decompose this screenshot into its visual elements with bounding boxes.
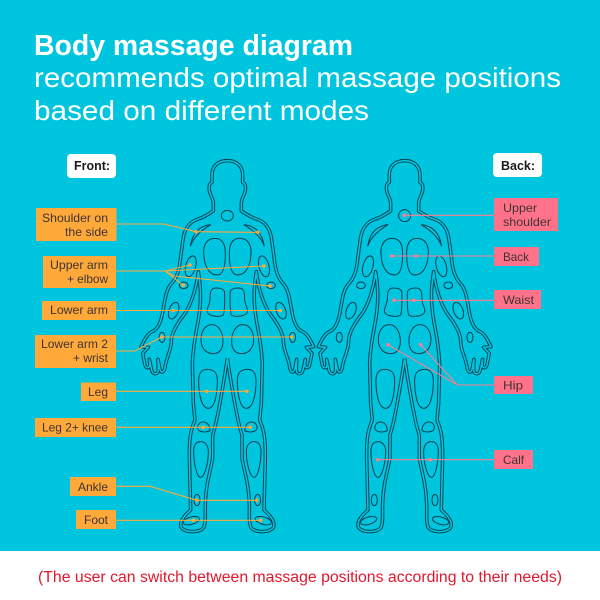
title: Body massage diagram (34, 30, 353, 62)
title: recommends optimal massage positions (34, 62, 561, 93)
back body figure (318, 161, 491, 532)
front heading (67, 154, 116, 178)
callout: upper shoulder (402, 198, 558, 231)
back heading (493, 153, 542, 177)
callout: waist: Waist (503, 293, 535, 307)
callout: back (390, 247, 539, 266)
callout: back: Back (503, 250, 530, 264)
callout: upper arm and elbow: Upper arm (50, 258, 108, 272)
callout: leg 2 and knee (35, 418, 252, 437)
callout: hip: Hip (503, 378, 523, 392)
title (34, 30, 561, 126)
callout: leg 2 and knee: Leg 2+ knee (42, 421, 108, 435)
back heading: Back: (501, 158, 535, 173)
callout: shoulder on the side (36, 208, 260, 241)
callout: ankle: Ankle (78, 480, 108, 494)
callout: shoulder on the side: the side (65, 225, 108, 239)
callout: foot: Foot (84, 513, 109, 527)
callout: leg (81, 382, 249, 401)
front body figure (141, 161, 314, 532)
title: based on different modes (34, 95, 369, 126)
callout: lower arm 2 and wrist: Lower arm 2 (41, 337, 108, 351)
callout: upper shoulder: shoulder (503, 215, 551, 229)
callout: lower arm 2 and wrist (35, 335, 294, 368)
callout: upper arm and elbow: + elbow (67, 272, 108, 286)
callout: foot (76, 510, 263, 529)
callout: lower arm (42, 301, 282, 320)
callout: upper shoulder: Upper (503, 201, 537, 215)
callout: hip (386, 343, 533, 394)
callout: shoulder on the side: Shoulder on (42, 211, 108, 225)
front heading: Front: (74, 158, 110, 173)
callout: upper arm and elbow (43, 256, 272, 288)
callout: calf (376, 450, 533, 469)
callout: ankle (70, 477, 258, 502)
footer note: (The user can switch between massage positions according to their needs) (38, 569, 562, 586)
callout: calf: Calf (503, 453, 525, 467)
callout: lower arm 2 and wrist: + wrist (73, 351, 109, 365)
callout: waist (392, 290, 541, 309)
callout: leg: Leg (88, 385, 108, 399)
callout: lower arm: Lower arm (50, 303, 108, 317)
